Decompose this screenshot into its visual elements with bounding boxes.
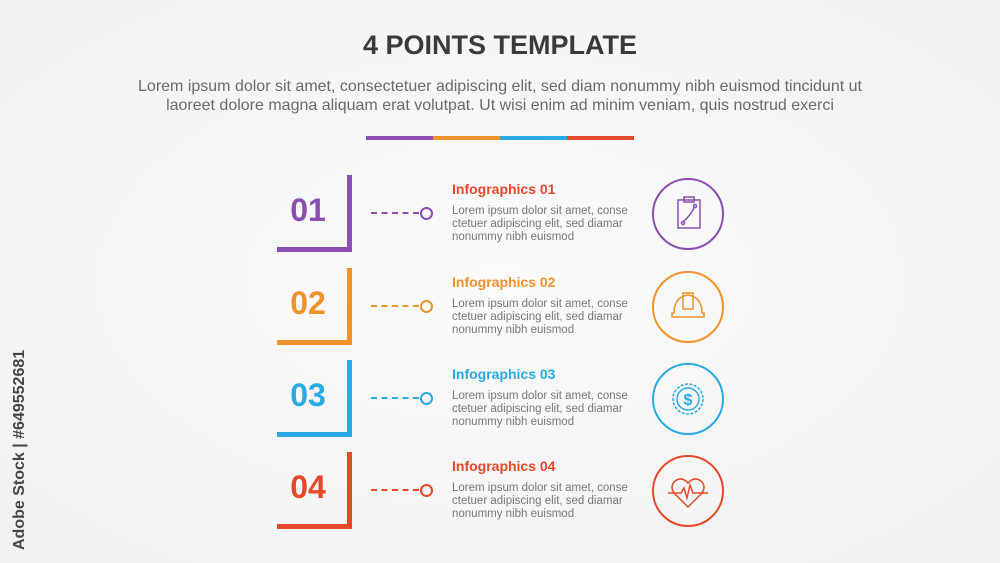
row 2 — [277, 268, 724, 345]
subtitle: Lorem ipsum dolor sit amet, consectetuer adipiscing elit, sed diam nonummy nibh euismod tincidunt ut — [138, 78, 862, 95]
watermark side text: Adobe Stock | #649552681 — [11, 350, 28, 550]
icon 2: helmet — [652, 271, 724, 343]
text 3: nonummy nibh euismod — [452, 416, 574, 428]
text 2: nonummy nibh euismod — [452, 324, 574, 336]
text 1: Lorem ipsum dolor sit amet, conse — [452, 205, 628, 217]
connector 1 — [371, 212, 419, 214]
number 4: 04 — [290, 469, 326, 505]
text 2 — [452, 298, 628, 336]
number 1: 01 — [290, 192, 326, 228]
heading 3: Infographics 03 — [452, 366, 555, 382]
title: 4 POINTS TEMPLATE — [363, 30, 637, 60]
text 4: ctetuer adipiscing elit, sed diamar — [452, 495, 623, 507]
icon 4: heart — [652, 455, 724, 527]
row 1 — [277, 175, 724, 252]
text 4: nonummy nibh euismod — [452, 508, 574, 520]
number 2: 02 — [290, 285, 326, 321]
icon 3: coin — [652, 363, 724, 435]
text 3 — [452, 390, 628, 428]
text 1: ctetuer adipiscing elit, sed diamar — [452, 218, 623, 230]
connector 4 — [371, 489, 419, 491]
heading 1: Infographics 01 — [452, 181, 555, 197]
bracket 3 — [347, 360, 352, 436]
connector 2 — [371, 305, 419, 307]
subtitle: laoreet dolore magna aliquam erat volutpat. Ut wisi enim ad minim veniam, quis nostrud exerci — [166, 97, 834, 114]
icon 3: coin: $ — [684, 392, 693, 409]
text 2: ctetuer adipiscing elit, sed diamar — [452, 311, 623, 323]
bracket 2 — [347, 268, 352, 344]
text 1 — [452, 205, 628, 243]
bracket 1 — [347, 175, 352, 251]
heading 4: Infographics 04 — [452, 458, 555, 474]
color bar — [366, 136, 634, 140]
text 4: Lorem ipsum dolor sit amet, conse — [452, 482, 628, 494]
subtitle — [138, 78, 862, 114]
heading 2: Infographics 02 — [452, 274, 555, 290]
icon 1: clipboard — [652, 178, 724, 250]
row 4 — [277, 452, 724, 529]
row 3 — [277, 360, 724, 437]
text 3: Lorem ipsum dolor sit amet, conse — [452, 390, 628, 402]
text 2: Lorem ipsum dolor sit amet, conse — [452, 298, 628, 310]
text 1: nonummy nibh euismod — [452, 231, 574, 243]
connector 3 — [371, 397, 419, 399]
number 3: 03 — [290, 377, 326, 413]
text 4 — [452, 482, 628, 520]
text 3: ctetuer adipiscing elit, sed diamar — [452, 403, 623, 415]
bracket 4 — [347, 452, 352, 528]
